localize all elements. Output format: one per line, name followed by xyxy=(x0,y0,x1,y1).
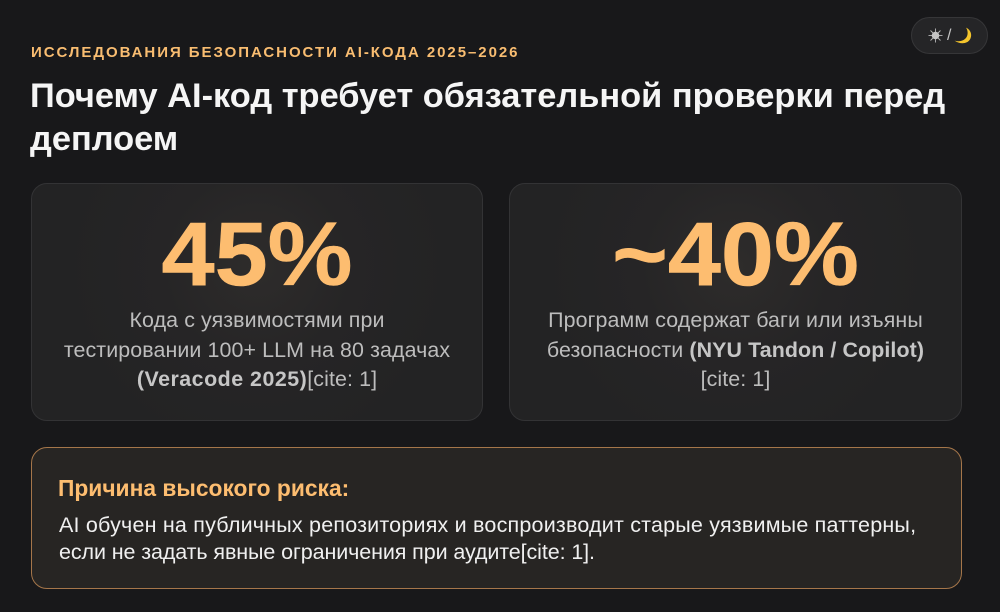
stat description: Кода с уязвимостями при xyxy=(129,308,384,332)
theme toggle xyxy=(911,17,988,54)
icon: moon xyxy=(954,28,972,44)
callout text: если не задать явные ограничения при аудите[cite: 1]. xyxy=(59,540,595,564)
toggle separator: / xyxy=(947,27,951,44)
stat description: [cite: 1] xyxy=(701,367,770,391)
stat description: тестировании 100+ LLM на 80 задачах xyxy=(64,338,450,362)
title: Почему AI-код требует обязательной проверки перед xyxy=(30,77,945,115)
icon: sun xyxy=(928,28,942,42)
eyebrow label: ИССЛЕДОВАНИЯ БЕЗОПАСНОСТИ AI-КОДА 2025–2026 xyxy=(31,44,519,61)
stat value: 45% xyxy=(162,205,352,305)
title: деплоем xyxy=(30,120,178,158)
panel: 45% stat xyxy=(31,183,483,421)
stat description xyxy=(547,308,924,391)
callout text xyxy=(59,513,916,564)
callout text: AI обучен на публичных репозиториях и воспроизводит старые уязвимые паттерны, xyxy=(59,513,916,537)
stat description xyxy=(64,308,450,391)
stat value: ~40% xyxy=(612,205,859,305)
panel: ~40% stat xyxy=(509,183,962,421)
callout heading: Причина высокого риска: xyxy=(58,475,349,501)
stat description: (Veracode 2025)[cite: 1] xyxy=(137,367,377,391)
stat description: безопасности (NYU Tandon / Copilot) xyxy=(547,338,924,362)
title xyxy=(30,77,945,158)
panel: risk cause callout xyxy=(31,447,962,589)
stat description: Программ содержат баги или изъяны xyxy=(548,308,923,332)
